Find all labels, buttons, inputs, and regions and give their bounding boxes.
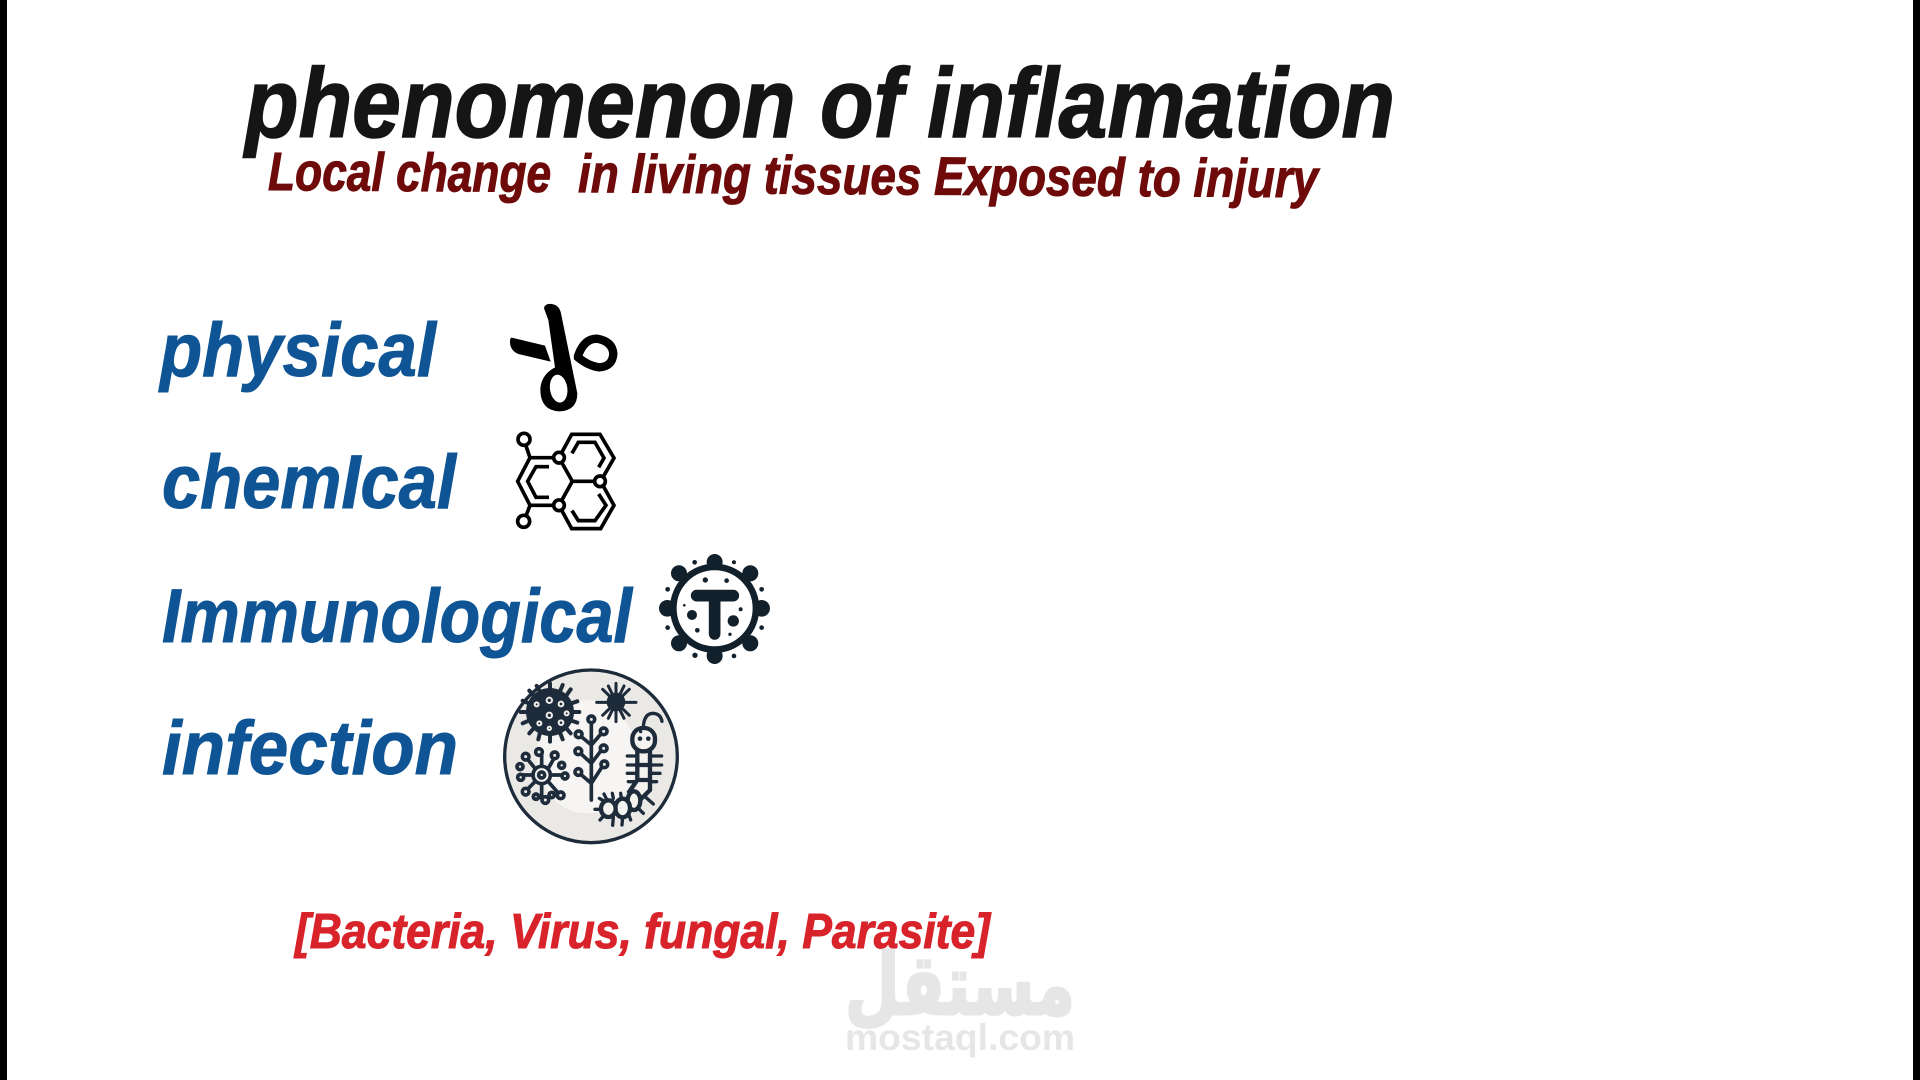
spiked cell: [517, 749, 568, 803]
virus: [521, 683, 579, 742]
sun microbe: [597, 683, 636, 722]
label: chemical: chemIcal: [162, 440, 458, 525]
watermark: mostaql.com: [845, 1017, 1075, 1058]
label: physical: physical: [158, 308, 438, 393]
caption: infection types: [Bacteria, Virus, fungal, Parasite]: [293, 905, 992, 959]
title: phenomenon of inflamation: [242, 48, 1395, 158]
subtitle: in living tissues Exposed to injury: [578, 144, 1321, 209]
branching fungus: [579, 723, 603, 800]
watermark: مستقل: [845, 936, 1075, 1034]
icon: molecule: [518, 433, 614, 529]
icon: scissors: [510, 304, 613, 411]
watermark: [845, 936, 1075, 1058]
icon: T cell: [659, 554, 770, 664]
label: immunological: Immunological: [162, 574, 634, 659]
subtitle: Local change: [268, 142, 551, 204]
label: infection: infection: [162, 706, 458, 791]
parasite worm: [595, 713, 662, 825]
icon: pathogens circle: [505, 670, 677, 843]
subtitle: [268, 142, 1321, 209]
